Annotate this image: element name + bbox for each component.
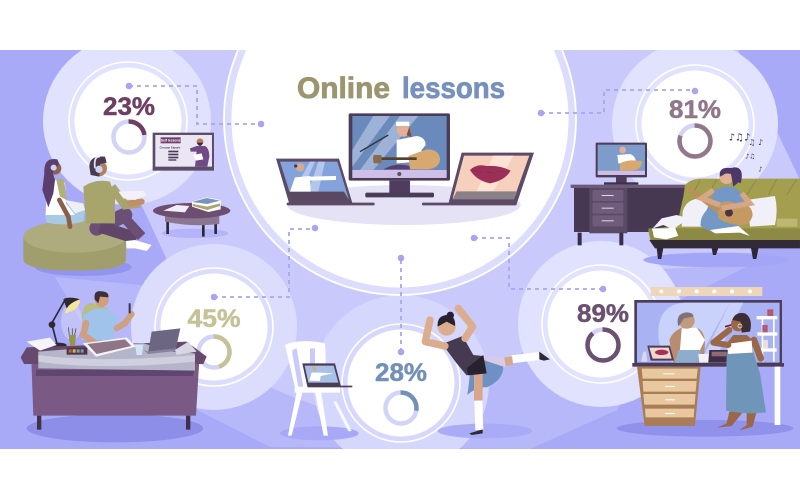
music notes: ♪♫♪ xyxy=(729,133,750,144)
girl with guitar xyxy=(652,167,753,239)
sofa xyxy=(648,179,800,259)
desk shadow xyxy=(27,414,203,442)
scene: man painting at desk xyxy=(21,291,207,442)
desk with monitor xyxy=(571,143,686,245)
wall screen with teacher: Self lessons xyxy=(161,139,181,143)
floor shadow xyxy=(617,420,793,437)
right laptop xyxy=(422,153,534,205)
woman xyxy=(42,159,85,227)
stat: 28% xyxy=(375,359,427,424)
shelf xyxy=(757,309,777,362)
title: Online xyxy=(297,72,390,105)
coffee table and books xyxy=(153,197,230,238)
wall screen with teacher xyxy=(153,133,214,171)
desk lamp xyxy=(49,298,82,348)
stat: 23% xyxy=(103,93,155,152)
sofa shadow xyxy=(643,253,790,267)
vanity light bar xyxy=(651,287,762,296)
scene: central devices xyxy=(276,113,534,225)
stat: 45% xyxy=(188,305,240,368)
stat: 89%: 89% xyxy=(577,300,629,328)
artist xyxy=(82,291,132,343)
cosmetics table items xyxy=(641,346,729,363)
woman applying lipstick xyxy=(713,313,766,430)
connector dots xyxy=(126,83,698,355)
circle rings xyxy=(68,50,755,443)
stat: 23%: 23% xyxy=(103,93,155,121)
scene: ballet dancer with laptop on chair xyxy=(280,308,550,440)
stat: 81%: 81% xyxy=(669,96,721,124)
vanity table and drawers xyxy=(632,363,784,426)
stat: 45%: 45% xyxy=(188,305,240,333)
scene: couple with headphones watching a lesson xyxy=(23,133,230,276)
scene: woman at makeup mirror xyxy=(617,287,793,437)
stat: 89% xyxy=(577,300,629,360)
wall screen with teacher: Concept Signals xyxy=(160,146,181,150)
scene: girl playing guitar on sofa: ♫ ♪ xyxy=(748,138,763,147)
monitor with guitarist xyxy=(349,113,450,197)
mirror xyxy=(634,300,782,363)
laptop on chair xyxy=(302,363,352,387)
scene: girl playing guitar on sofa: ♪ xyxy=(758,166,763,174)
left laptop xyxy=(276,159,375,205)
scene: girl playing guitar on sofa xyxy=(571,133,800,267)
pouf with shadow xyxy=(23,221,132,276)
dancer shadow xyxy=(438,424,532,438)
desk items xyxy=(27,327,197,357)
reflection of woman xyxy=(669,312,705,363)
scene: girl playing guitar on sofa: ♪♫ xyxy=(745,152,755,160)
dancer xyxy=(425,308,550,435)
infographic canvas xyxy=(0,50,800,449)
devices shadow xyxy=(287,185,521,225)
background panel xyxy=(0,50,800,449)
man xyxy=(83,156,152,251)
desk xyxy=(21,342,207,430)
stat: 28%: 28% xyxy=(375,359,427,387)
title: lessons xyxy=(402,72,505,105)
title xyxy=(297,72,505,105)
connector lines xyxy=(129,86,695,352)
white chair xyxy=(285,341,352,436)
stat: 81% xyxy=(669,96,721,156)
floor shadows xyxy=(280,426,359,440)
